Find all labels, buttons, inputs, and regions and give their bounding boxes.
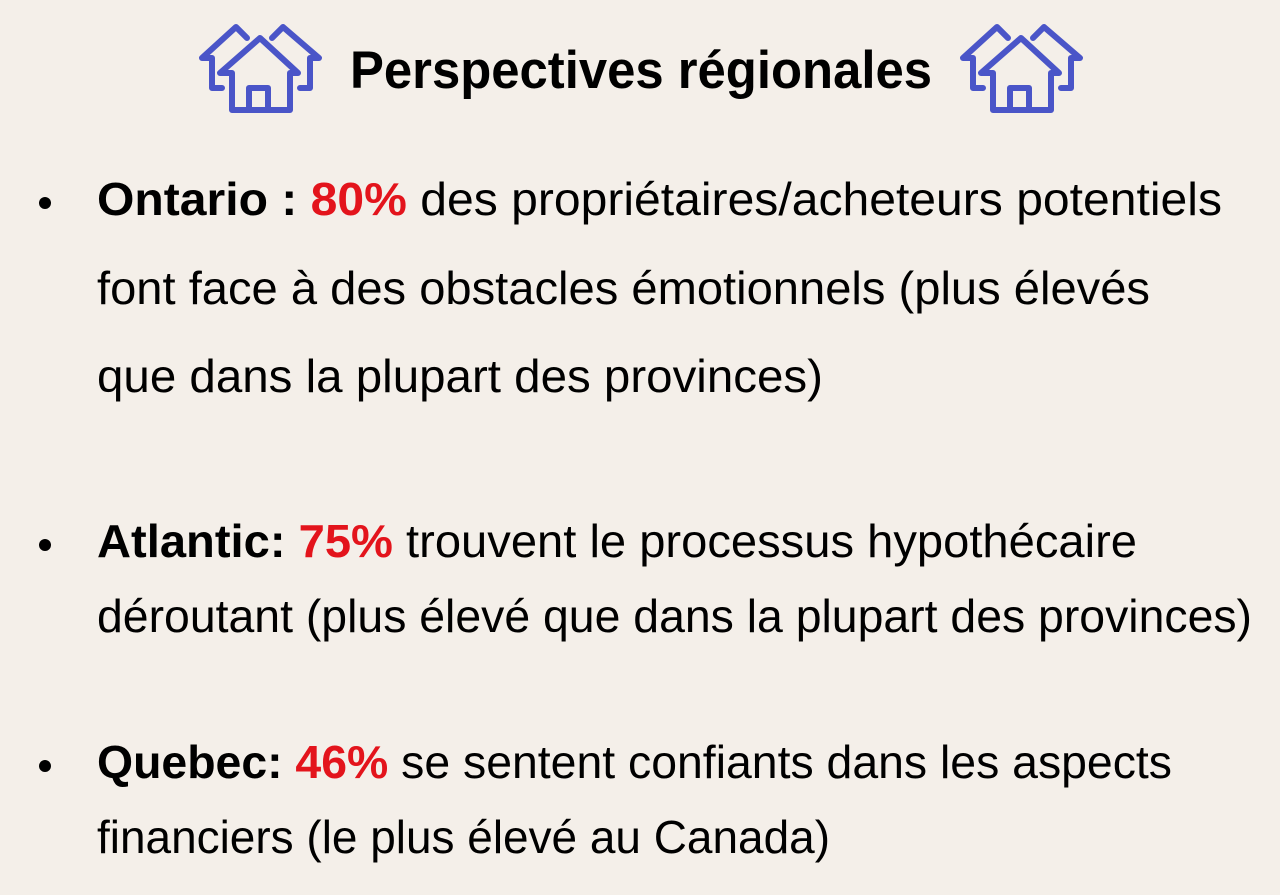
bullet: Ontario: font face à des obstacles émotionnels (plus élevés [97,262,1150,314]
bullet: Atlantic: déroutant (plus élevé que dans la plupart des provinces) [97,590,1252,642]
bullet: Ontario: que dans la plupart des provinces) [97,350,823,402]
bullet: Atlantic [39,515,1252,642]
bullet: Ontario: Ontario : 80% des propriétaires/acheteurs potentiels [97,173,1222,225]
icon: houses left [202,27,319,110]
bullet: Quebec: Quebec: 46% se sentent confiants dans les aspects [97,736,1172,788]
bullet: Quebec: financiers (le plus élevé au Canada) [97,811,830,863]
icon: houses right [963,27,1080,110]
title: Perspectives régionales [350,41,932,100]
bullet: Atlantic: Atlantic: 75% trouvent le processus hypothécaire [97,515,1137,567]
bullet: Ontario [39,173,1222,402]
bullet: Quebec [39,736,1172,863]
